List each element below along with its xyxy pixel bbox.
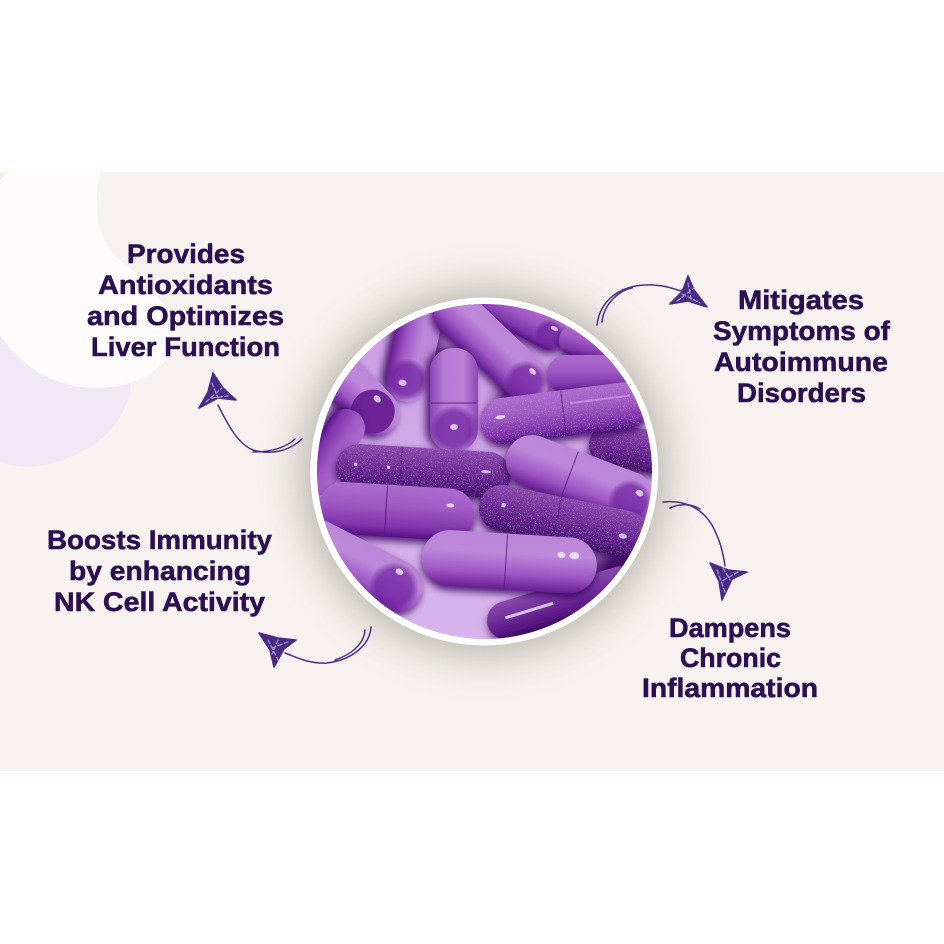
decorative blob: white bbox=[0, 172, 176, 388]
text: Mitigates Symptoms of Autoimmune Disorders: Disorders bbox=[737, 378, 866, 408]
arrow: to top right text bbox=[597, 276, 707, 325]
arrow: to top left text bbox=[199, 373, 302, 452]
photo ring bbox=[310, 298, 658, 646]
decorative blob: lavender bbox=[0, 335, 131, 466]
panel: background bbox=[0, 172, 944, 771]
text: Dampens Chronic Inflammation: Inflammation bbox=[642, 673, 818, 703]
text: Provides Antioxidants and Optimizes Liver Function: and Optimizes bbox=[87, 301, 284, 331]
text: Provides Antioxidants and Optimizes Liver Function bbox=[87, 239, 284, 362]
decorative corner bbox=[0, 172, 7, 181]
text: Mitigates Symptoms of Autoimmune Disorders: Symptoms of bbox=[713, 316, 891, 346]
arrow: to bottom left text bbox=[259, 627, 371, 667]
circle shadow bbox=[304, 292, 664, 652]
text: Dampens Chronic Inflammation: Dampens bbox=[669, 613, 791, 643]
text: Provides Antioxidants and Optimizes Liver Function: Antioxidants bbox=[98, 270, 273, 300]
text: Provides Antioxidants and Optimizes Liver Function: Liver Function bbox=[91, 332, 280, 362]
text: Boosts Immunity by enhancing NK Cell Activity bbox=[47, 525, 272, 617]
text: Mitigates Symptoms of Autoimmune Disorders bbox=[713, 285, 891, 408]
text: Dampens Chronic Inflammation bbox=[642, 613, 818, 703]
text: Boosts Immunity by enhancing NK Cell Activity: Boosts Immunity bbox=[47, 525, 272, 555]
photo: purple capsules bbox=[317, 304, 652, 639]
text: Boosts Immunity by enhancing NK Cell Activity: by enhancing bbox=[69, 556, 251, 586]
arrow: to bottom right text bbox=[663, 502, 747, 600]
text: Boosts Immunity by enhancing NK Cell Activity: NK Cell Activity bbox=[54, 587, 265, 617]
text: Provides Antioxidants and Optimizes Liver Function: Provides bbox=[127, 239, 245, 269]
text: Mitigates Symptoms of Autoimmune Disorders: Mitigates bbox=[738, 285, 864, 315]
text: Dampens Chronic Inflammation: Chronic bbox=[680, 643, 781, 673]
text: Mitigates Symptoms of Autoimmune Disorders: Autoimmune bbox=[714, 347, 888, 377]
